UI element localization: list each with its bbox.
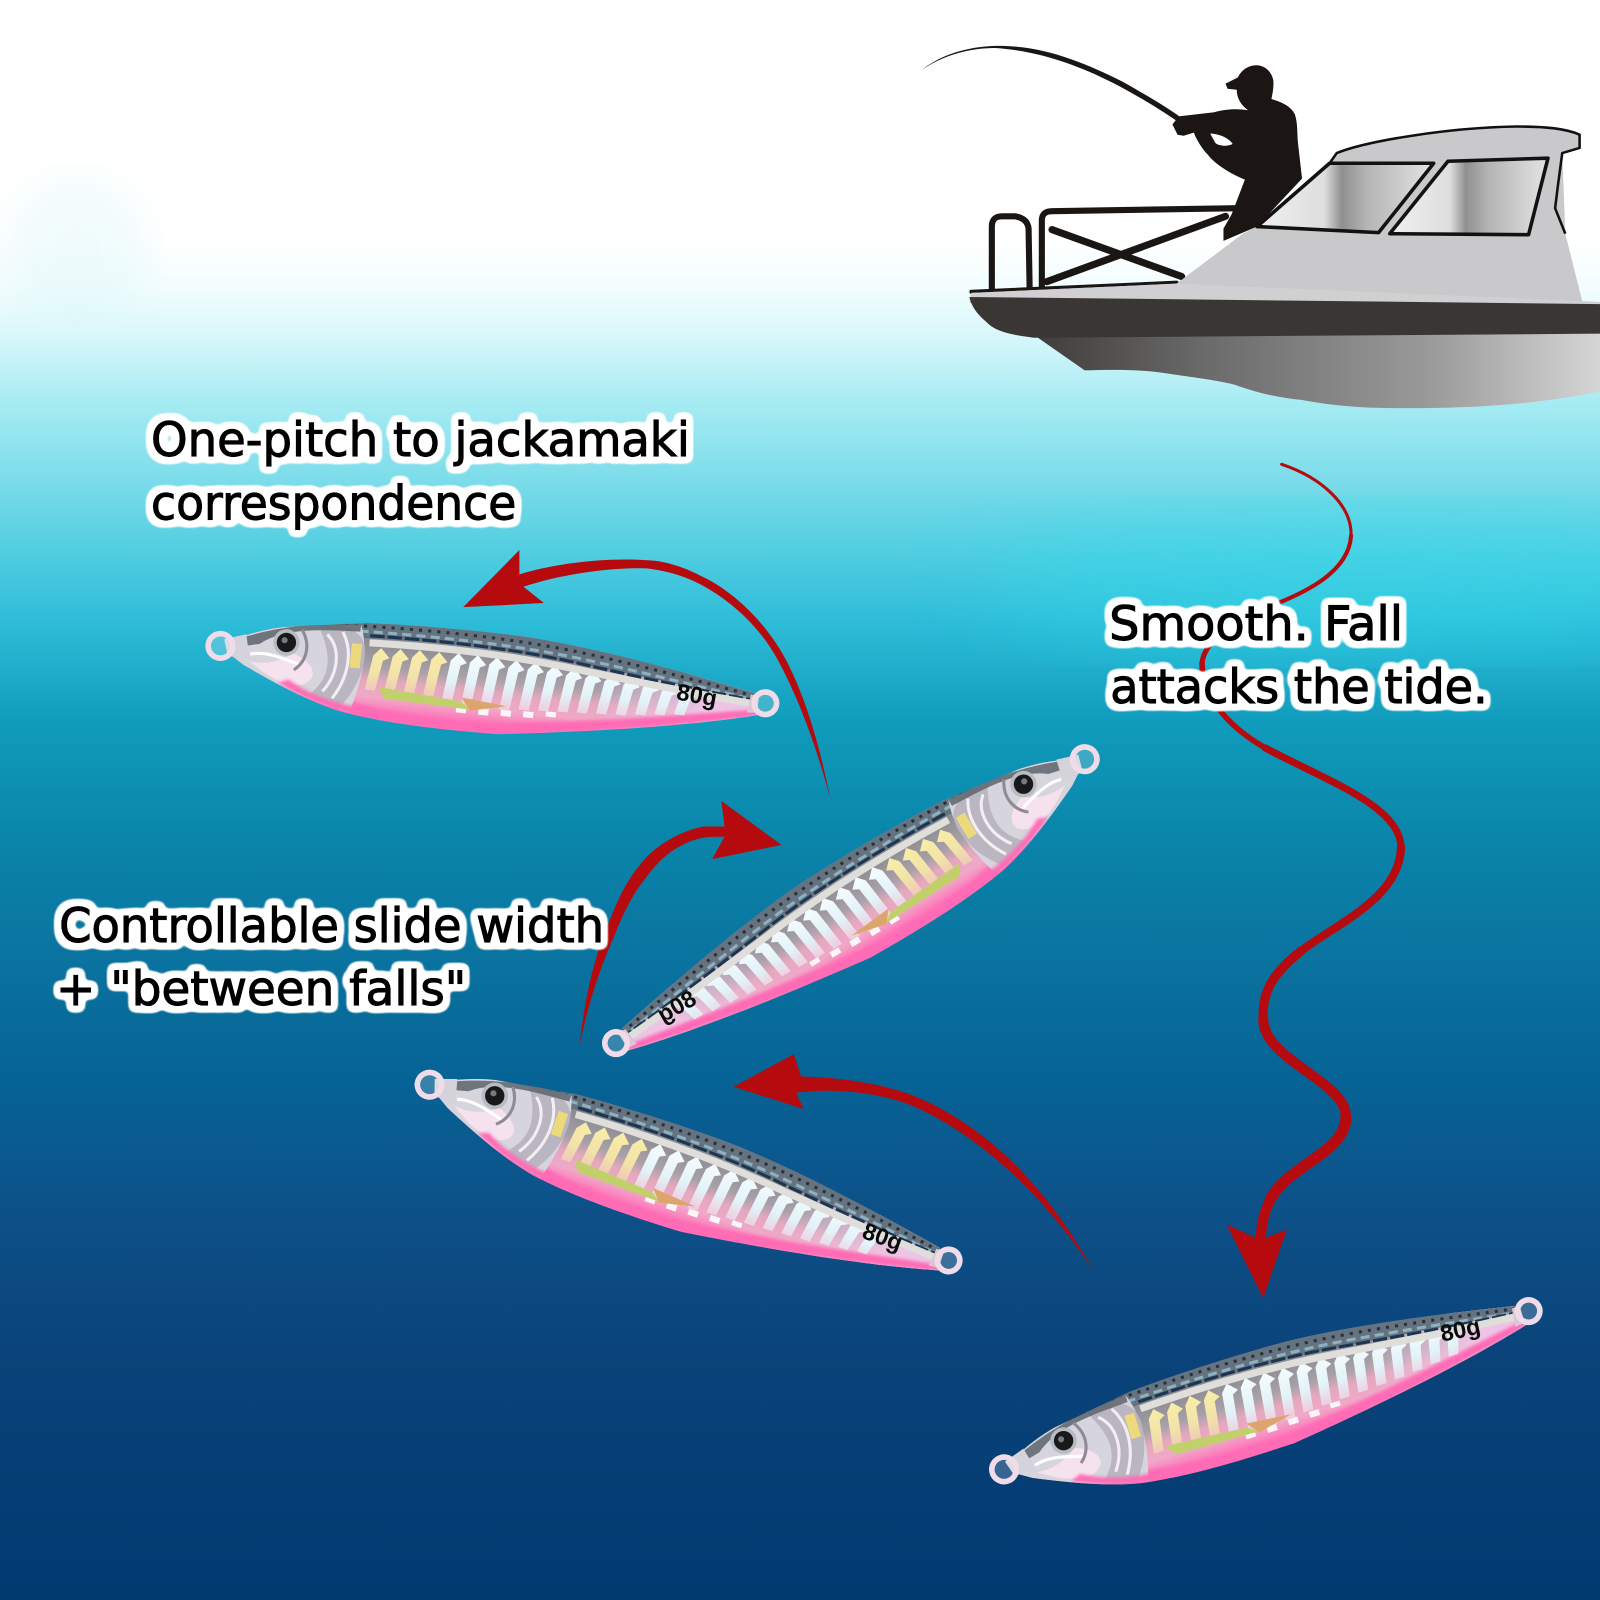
text: one-pitch label — [151, 413, 690, 531]
arrow: one-pitch curve — [463, 550, 831, 800]
text: smooth fall label: Smooth. Fall — [1109, 597, 1403, 652]
lure: middle right — [585, 718, 1126, 1099]
icon: fishing rod — [922, 46, 1184, 121]
arrow: wavy fall path — [1202, 464, 1401, 1298]
text: one-pitch label: correspondence — [151, 476, 516, 531]
lure: middle left — [399, 1042, 973, 1320]
icon: roof and pillar outline — [1330, 127, 1580, 234]
icon: hull band — [969, 297, 1600, 338]
text: smooth fall label — [1109, 597, 1488, 715]
boat with fisherman — [922, 46, 1600, 408]
weight label: 80g — [859, 1218, 906, 1256]
icon: windows — [1257, 158, 1548, 235]
weight label: 80g — [1438, 1313, 1483, 1347]
text: slide width label: Controllable slide width — [59, 899, 604, 954]
text: smooth fall label: attacks the tide. — [1110, 660, 1488, 715]
icon: deck edge — [969, 284, 1600, 306]
icon: cabin — [969, 127, 1583, 303]
icon: boat railing — [971, 208, 1239, 292]
weight label: 80g — [675, 679, 719, 711]
text: slide width label: + "between falls" — [56, 962, 466, 1017]
lure: top — [202, 604, 781, 763]
text: slide width label — [56, 899, 604, 1017]
icon: fisherman silhouette — [1172, 65, 1302, 241]
text: one-pitch label: One-pitch to jackamaki — [151, 413, 690, 468]
lure: bottom right — [980, 1267, 1557, 1530]
arrow: slide curve — [580, 801, 782, 1046]
icon: lower hull — [1034, 332, 1600, 408]
weight label mirrored: 80g — [653, 985, 701, 1028]
arrow: return curve — [734, 1054, 1095, 1273]
